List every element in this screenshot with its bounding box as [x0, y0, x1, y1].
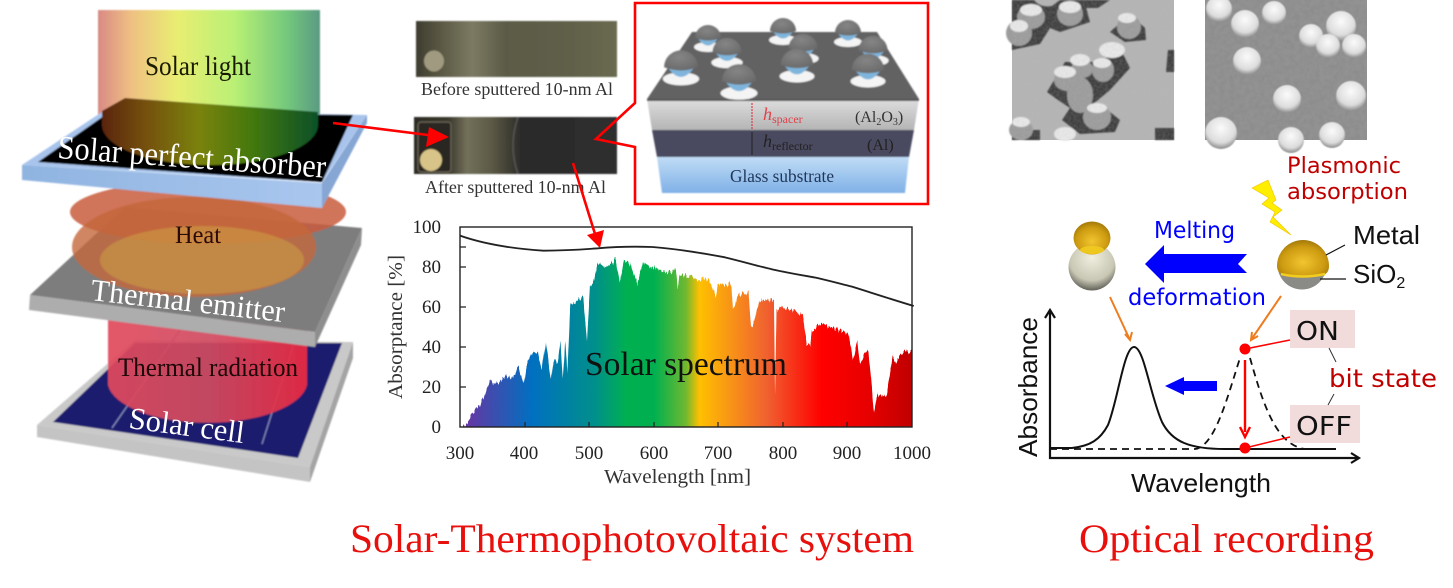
sample photo: after sputtering — [414, 117, 617, 174]
SEM image: before melting — [1006, 0, 1174, 141]
label: solar cell: Solar cell — [127, 400, 247, 450]
leader lines to metal and silica — [1320, 245, 1346, 279]
label: h spacer: spacer — [772, 112, 803, 126]
label: metal: Metal — [1353, 220, 1420, 250]
diagram: layered absorber structure — [647, 18, 919, 193]
label: off: OFF — [1296, 412, 1352, 442]
y-axis ticks: 0 — [432, 417, 441, 438]
solar spectrum area — [462, 260, 912, 433]
label: deformation: deformation — [1128, 285, 1266, 311]
y-axis ticks — [412, 217, 441, 438]
diagram: solar thermophotovoltaic stack — [22, 10, 367, 482]
thermal emitter plate — [29, 207, 362, 347]
arrow: absorber to sample — [333, 123, 449, 147]
arrow: peak shift — [1165, 377, 1217, 395]
label: h reflector: reflector — [772, 139, 813, 153]
y-axis ticks: 40 — [422, 337, 441, 358]
sample photo: before sputtering — [416, 21, 617, 77]
x-axis ticks: 500 — [575, 443, 603, 464]
label: solar spectrum: Solar spectrum — [585, 346, 787, 383]
thermal radiation beam — [108, 320, 307, 423]
label: heat: Heat — [175, 222, 221, 249]
y-axis ticks: 20 — [422, 377, 441, 398]
label: h reflector: h — [763, 131, 772, 151]
label: glass substrate: Glass substrate — [730, 166, 834, 186]
label: thermal emitter: Thermal emitter — [89, 272, 288, 329]
x-axis ticks: 700 — [704, 443, 732, 464]
label: solar light: Solar light — [145, 51, 251, 81]
label: h spacer: h — [763, 104, 772, 124]
label: Al2O3: 3 — [893, 117, 898, 128]
axes — [1045, 310, 1359, 463]
y-axis ticks: 80 — [422, 257, 441, 278]
y-axis title: Absorbance — [1013, 317, 1043, 457]
arrow: on to off — [1240, 360, 1250, 437]
arrow: to melted peak — [1110, 297, 1132, 340]
chart: absorptance and solar spectrum — [385, 217, 931, 488]
SEM image: after melting — [1205, 0, 1367, 153]
solar perfect absorber plate — [22, 98, 367, 208]
label: Al2O3: ) — [898, 109, 903, 126]
y-axis ticks: 60 — [422, 297, 441, 318]
label: bit state: bit state — [1329, 364, 1437, 393]
callout: red zoom frame with pointer — [596, 3, 928, 204]
caption: after sputtered: After sputtered 10-nm Al — [425, 177, 606, 197]
x-axis ticks: 800 — [769, 443, 797, 464]
x-axis title: Wavelength — [1131, 468, 1271, 498]
icon: lightning bolt — [1252, 180, 1291, 235]
reflector height marker — [751, 132, 753, 155]
red leader lines — [1245, 340, 1290, 448]
label: SiO2: SiO — [1353, 259, 1396, 289]
solid peak — [1050, 347, 1336, 449]
bit state connectors — [1328, 348, 1336, 405]
label: solar perfect absorber: Solar perfect absorber — [56, 130, 327, 186]
x-axis title: Wavelength [nm] — [604, 466, 751, 488]
chart: absorbance versus wavelength — [1013, 310, 1437, 498]
label: Al2O3: O — [881, 109, 893, 126]
solar cell plate — [37, 330, 353, 482]
on box — [1290, 310, 1355, 348]
label: plasmonic absorption: absorption — [1287, 180, 1408, 205]
solar light beam — [98, 10, 320, 135]
label: Al2O3: (Al — [855, 109, 876, 126]
x-axis ticks: 300 — [446, 443, 474, 464]
label: plasmonic absorption — [1287, 154, 1408, 205]
off box — [1290, 405, 1360, 443]
x-axis ticks: 1000 — [893, 443, 931, 464]
y-axis title: Absorptance [%] — [385, 255, 407, 399]
on state dot — [1240, 344, 1250, 354]
label: plasmonic absorption: Plasmonic — [1287, 154, 1401, 179]
dashed peak — [1050, 358, 1305, 449]
x-axis ticks: 400 — [510, 443, 538, 464]
label: on: ON — [1296, 317, 1339, 347]
off state dot — [1240, 442, 1250, 454]
particle: metal cap on silica — [1277, 240, 1329, 290]
arrow: to unmelted peak — [1251, 296, 1281, 340]
particle: deformed metal on silica — [1068, 222, 1116, 290]
x-axis ticks — [446, 443, 931, 464]
arrow: melting deformation — [1145, 245, 1247, 283]
plot frame — [460, 227, 912, 427]
title: solar-thermophotovoltaic system: Solar-Thermophotovoltaic system — [350, 516, 914, 561]
spacer height marker — [751, 103, 753, 129]
x-axis ticks: 900 — [833, 443, 861, 464]
arrow: sample to absorptance curve — [573, 163, 604, 248]
caption: before sputtered: Before sputtered 10-nm Al — [421, 79, 613, 99]
label: Al: (Al) — [867, 137, 894, 154]
label: SiO2: 2 — [1396, 275, 1405, 292]
x-axis ticks: 600 — [640, 443, 668, 464]
label: Al2O3: 2 — [876, 117, 881, 128]
title: optical recording: Optical recording — [1079, 516, 1374, 561]
label: thermal radiation: Thermal radiation — [118, 353, 298, 382]
absorptance curve — [460, 236, 914, 306]
label: melting: Melting — [1154, 218, 1235, 244]
y-axis ticks: 100 — [412, 217, 441, 238]
heat lobes — [70, 180, 346, 297]
